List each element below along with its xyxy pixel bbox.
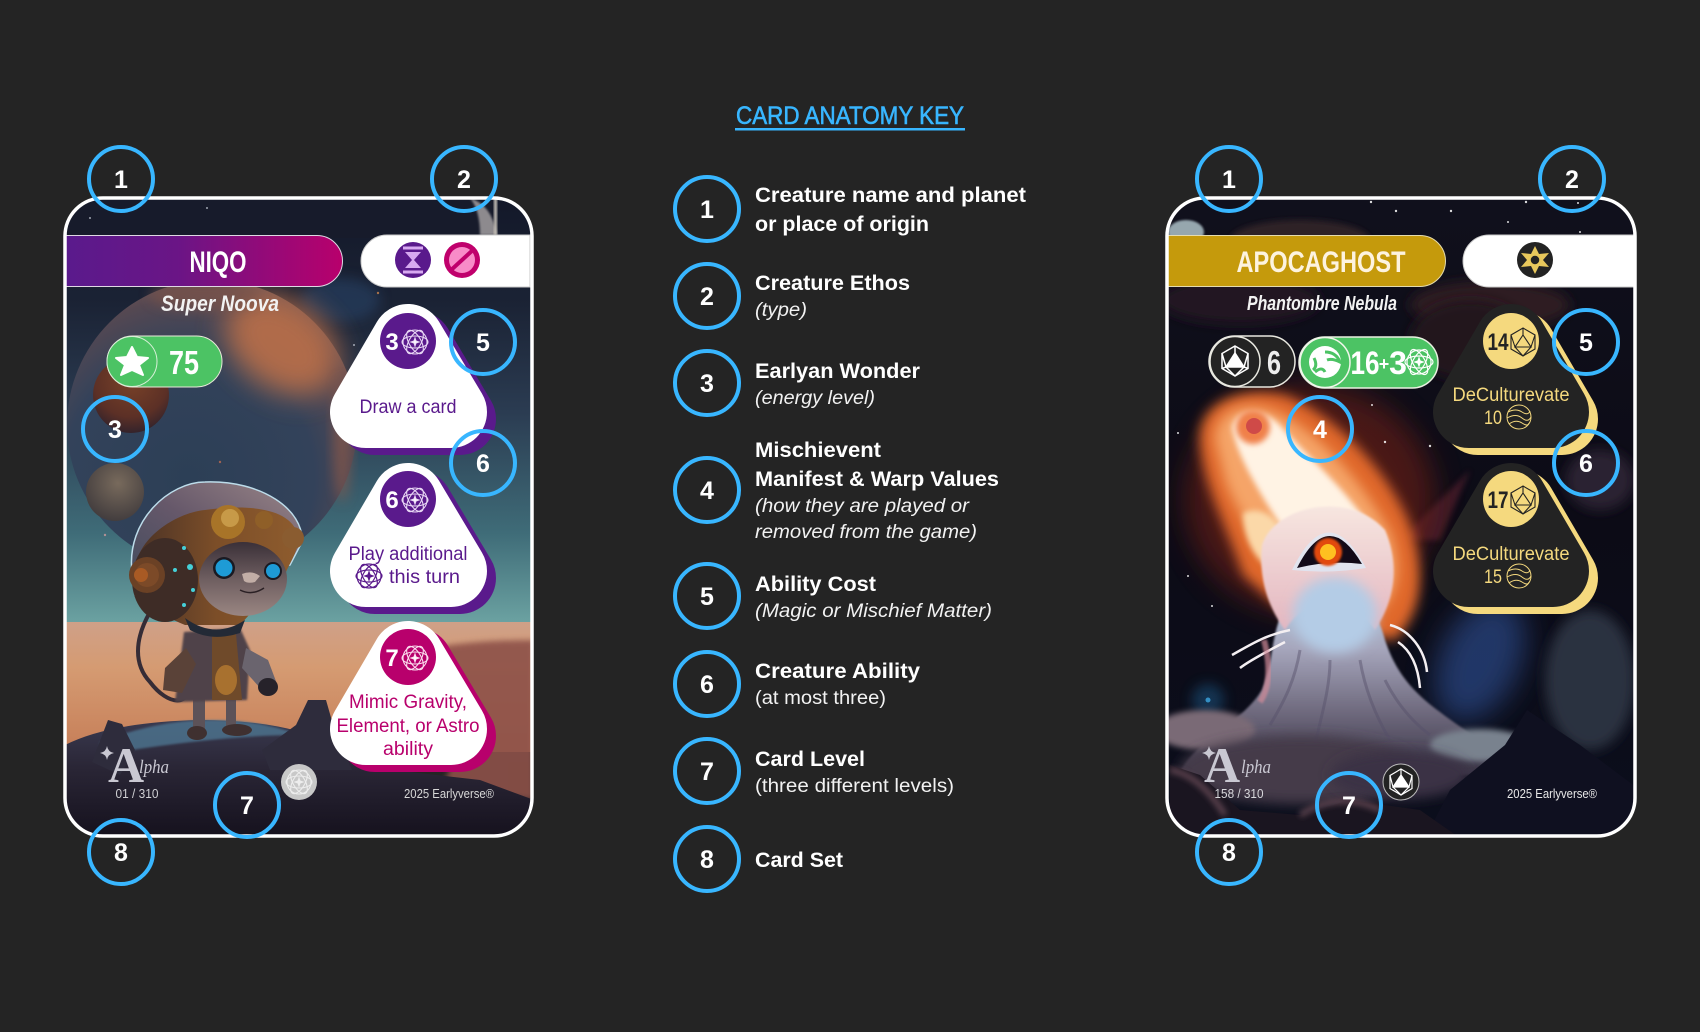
callout 8 on Apocaghost card <box>1197 820 1261 884</box>
set logo: Alpha: A <box>108 737 144 793</box>
callout 3 on Niqo card <box>83 397 147 461</box>
icon: hourglass ethos <box>395 242 431 278</box>
ability cost: 14 <box>1488 329 1509 356</box>
key item 2 <box>675 264 910 328</box>
warp value pill: 16 <box>1350 345 1380 381</box>
key item 7 <box>675 739 954 803</box>
key item 1: 1 <box>700 196 714 224</box>
key item 2: Creature Ethos <box>755 272 910 295</box>
callout 5 on Niqo card <box>451 310 515 374</box>
Earlyan wonder pill: 75 <box>169 344 199 381</box>
icon: slash ethos <box>444 242 480 278</box>
ability cost: 7 <box>385 645 399 672</box>
planet of origin: Super Noova <box>161 291 279 316</box>
creature: Niqo astronaut <box>129 482 304 740</box>
ability: play additional: Play additional <box>348 544 468 565</box>
key item 6: Creature Ability <box>755 660 920 683</box>
callout 6 on Niqo card <box>451 431 515 495</box>
key item 8 <box>675 827 843 891</box>
ability: mimic <box>336 629 480 760</box>
Earlyan wonder pill <box>107 336 222 387</box>
ability: deculturevate 10 <box>1452 313 1570 429</box>
panel: Niqo card <box>65 198 534 838</box>
name bar <box>66 236 342 286</box>
key item 1: Creature name and planet <box>755 184 1026 207</box>
level badge <box>1383 764 1419 800</box>
card number: 158 / 310 <box>1214 786 1264 801</box>
callout 7 on Niqo card: 7 <box>240 792 254 820</box>
warp value pill <box>1299 337 1438 388</box>
set logo: Alpha: A <box>1204 737 1240 793</box>
manifest value pill: 6 <box>1267 344 1281 381</box>
callout 8 on Niqo card <box>89 820 153 884</box>
icon: swirl <box>1309 346 1341 378</box>
icon: star <box>116 347 148 375</box>
icon: d20 <box>1222 346 1248 376</box>
ability cost: 6 <box>385 487 399 514</box>
key item 4: (how they are played or <box>755 496 970 517</box>
copyright: 2025 Earlyverse® <box>1507 786 1597 801</box>
callout 8 on Niqo card: 8 <box>114 839 128 867</box>
callout 6 on Apocaghost card <box>1554 431 1618 495</box>
key item 3: 3 <box>700 370 714 398</box>
key item 7: Card Level <box>755 748 865 771</box>
manifest value pill <box>1209 336 1295 387</box>
panel: key list <box>675 177 1026 891</box>
card art: nebula and flame creature <box>1155 198 1640 838</box>
callout 6 on Apocaghost card: 6 <box>1579 450 1593 478</box>
key item 8: Card Set <box>755 849 843 872</box>
key item 4: Manifest & Warp Values <box>755 468 999 491</box>
ability: deculturevate 10: 10 <box>1484 408 1502 429</box>
callout 1 on Niqo card: 1 <box>114 166 128 194</box>
panel: Apocaghost card <box>1155 198 1640 838</box>
key item 5 <box>675 564 992 628</box>
key item 5: 5 <box>700 583 714 611</box>
title: CARD ANATOMY KEY <box>736 102 964 130</box>
card border <box>65 198 532 836</box>
card number: 01 / 310 <box>116 786 158 801</box>
callout 2 on Apocaghost card: 2 <box>1565 166 1579 194</box>
callout 2 on Niqo card <box>432 147 496 211</box>
set logo: Alpha <box>100 737 169 793</box>
key item 7: 7 <box>700 758 714 786</box>
card border <box>1167 198 1635 836</box>
key item 8: 8 <box>700 846 714 874</box>
ability cost: 17 <box>1488 487 1508 514</box>
stars <box>1177 201 1581 607</box>
callout 2 on Apocaghost card <box>1540 147 1604 211</box>
level badge <box>281 764 317 800</box>
ability: draw a card <box>360 313 460 419</box>
callout 2 on Niqo card: 2 <box>457 166 471 194</box>
callout 5 on Niqo card: 5 <box>476 329 490 357</box>
ethos bar <box>361 235 530 287</box>
set logo: Alpha: lpha <box>1241 757 1271 778</box>
key item 2: (type) <box>755 300 807 321</box>
name bar: APOCAGHOST <box>1236 246 1406 279</box>
callout 7 on Niqo card <box>215 773 279 837</box>
key item 4: removed from the game) <box>755 522 977 543</box>
callout 4 on Apocaghost card: 4 <box>1313 416 1327 444</box>
callout 1 on Apocaghost card <box>1197 147 1261 211</box>
callout 4 on Apocaghost card <box>1288 397 1352 461</box>
ability: deculturevate 15: DeCulturevate <box>1452 544 1570 565</box>
callout 1 on Apocaghost card: 1 <box>1222 166 1236 194</box>
callout 5 on Apocaghost card: 5 <box>1579 329 1593 357</box>
set logo: Alpha <box>1202 737 1271 793</box>
key item 7: (three different levels) <box>755 776 954 797</box>
card art: planets and desert <box>65 198 534 838</box>
key item 3: (energy level) <box>755 388 875 409</box>
ability: deculturevate 15: 15 <box>1484 567 1502 588</box>
ability: play additional: this turn <box>389 567 460 588</box>
ability: play additional <box>348 471 468 590</box>
key item 6 <box>675 652 920 716</box>
callout 6 on Niqo card: 6 <box>476 450 490 478</box>
ability: deculturevate 15 <box>1452 471 1570 588</box>
callout 5 on Apocaghost card <box>1554 310 1618 374</box>
key item 3 <box>675 351 920 415</box>
ability: deculturevate 10: DeCulturevate <box>1452 385 1570 406</box>
key item 5: (Magic or Mischief Matter) <box>755 601 992 622</box>
key item 6: 6 <box>700 671 714 699</box>
ability cost: 3 <box>385 329 399 356</box>
key item 1: or place of origin <box>755 213 929 236</box>
key item 3: Earlyan Wonder <box>755 360 920 383</box>
copyright: 2025 Earlyverse® <box>404 786 494 801</box>
key item 6: (at most three) <box>755 688 886 709</box>
callout 1 on Niqo card <box>89 147 153 211</box>
callout 7 on Apocaghost card <box>1317 773 1381 837</box>
icon: sun ethos <box>1517 242 1553 278</box>
ability: mimic: Mimic Gravity, <box>349 692 467 713</box>
flame <box>1200 392 1420 640</box>
stars <box>89 207 379 536</box>
ethos bar <box>1463 235 1634 287</box>
name bar <box>1168 236 1446 286</box>
ability: mimic: Element, or Astro <box>336 716 480 737</box>
name bar: NIQO <box>190 246 246 279</box>
creature <box>1182 612 1489 775</box>
key item 2: 2 <box>700 283 714 311</box>
warp value pill: 3 <box>1389 345 1407 381</box>
key item 4: 4 <box>700 477 714 505</box>
ability: mimic: ability <box>383 739 434 760</box>
key item 1 <box>675 177 1026 241</box>
ability cost <box>380 629 436 685</box>
key item 5: Ability Cost <box>755 573 876 596</box>
ability: draw a card: Draw a card <box>360 397 456 418</box>
set logo: Alpha: lpha <box>139 757 169 778</box>
callout 8 on Apocaghost card: 8 <box>1222 839 1236 867</box>
callout 7 on Apocaghost card: 7 <box>1342 792 1356 820</box>
clouds <box>1155 710 1255 750</box>
key item 4: Mischievent <box>755 439 881 462</box>
key item 4 <box>675 439 999 543</box>
callout 3 on Niqo card: 3 <box>108 416 122 444</box>
warp value pill: + <box>1379 354 1389 374</box>
planet of origin: Phantombre Nebula <box>1247 293 1397 315</box>
